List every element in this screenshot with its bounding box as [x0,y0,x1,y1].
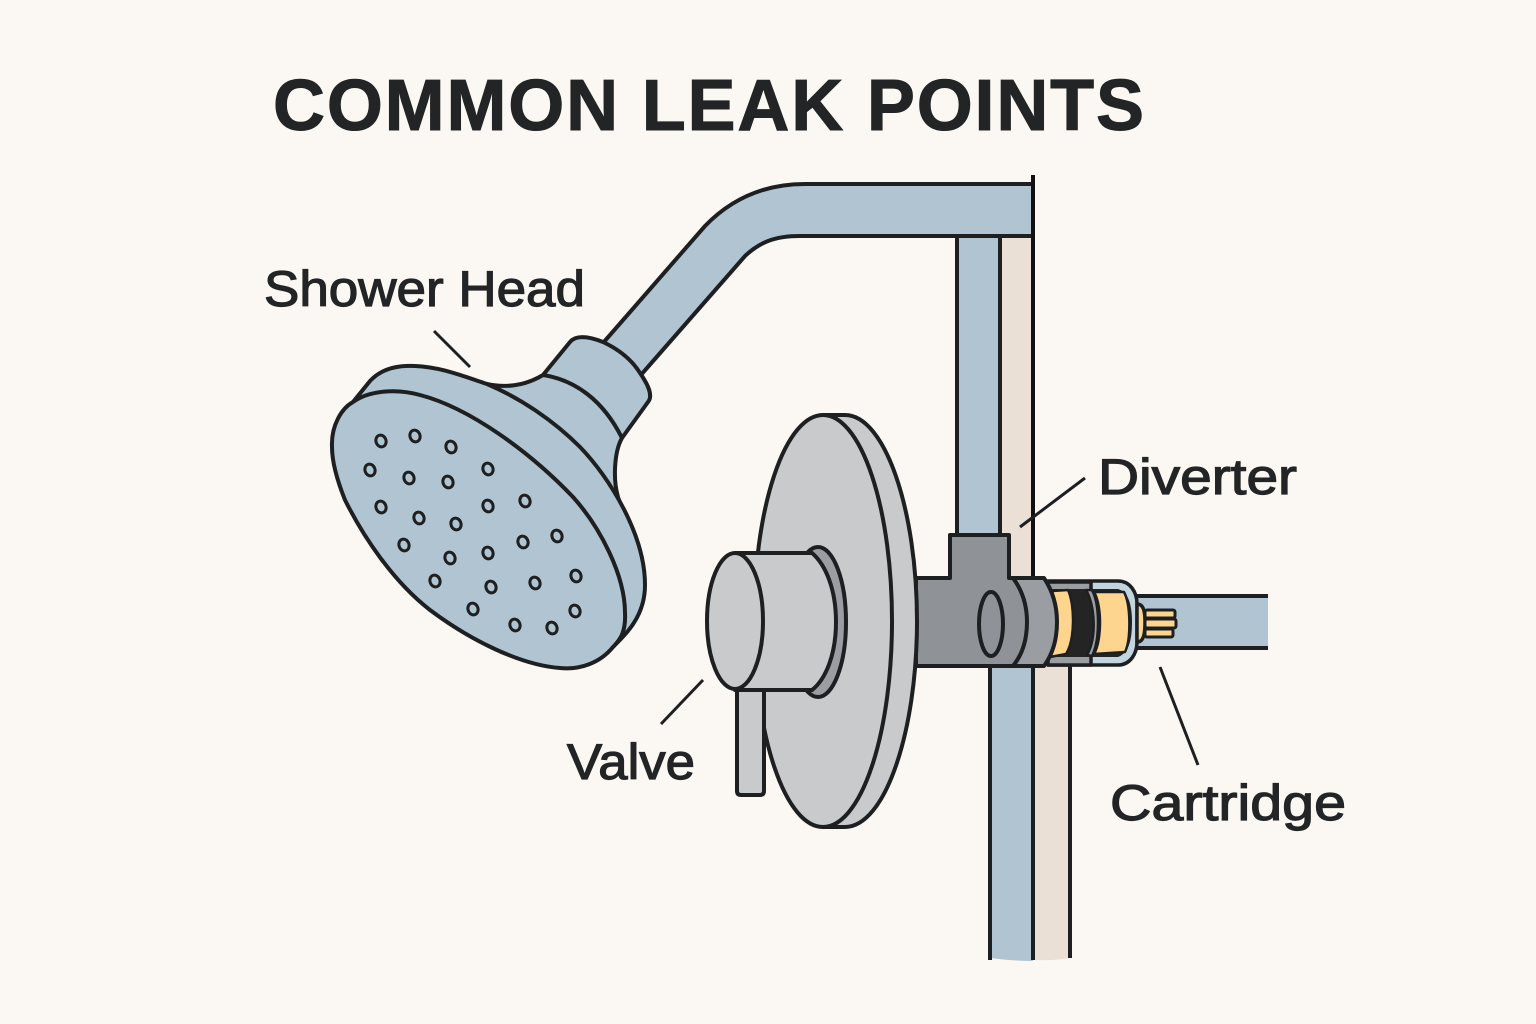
spray holes [363,429,583,635]
label: Shower Head [264,261,585,367]
upper wall section [1000,236,1033,580]
valve knob face [707,553,763,689]
face [332,391,625,668]
label: Diverter [1020,449,1297,527]
valve collar ring [790,547,846,697]
casing gray band [1048,582,1091,665]
valve plate rim [823,415,917,827]
shower arm [600,184,1033,378]
horizontal supply pipe [1130,596,1268,648]
diverter body [916,535,1057,666]
yellow seat [1050,590,1073,657]
title: COMMON LEAK POINTS [273,66,1144,146]
label: Cartridge [1110,667,1346,831]
label: Shower Head: Shower Head [264,261,585,317]
back rim [353,366,645,647]
diverter port [979,592,1003,656]
lower pipe outlines [990,665,1070,960]
yellow core [1094,592,1129,654]
neck and collar [487,337,650,560]
label: Valve [567,680,703,790]
valve hub [735,553,836,690]
shower head [332,337,650,668]
plumbing: wall and riser pipes [957,236,1070,961]
valve plate face [754,415,892,827]
valve [707,415,917,827]
stem tip [1137,604,1145,642]
valve handle [737,688,764,795]
label: Cartridge: Cartridge [1110,775,1346,831]
cartridge [1048,581,1176,665]
prongs [1145,610,1176,637]
gray ring [1086,590,1098,656]
label: Valve: Valve [567,734,695,790]
wall line [1031,175,1035,580]
inner cavity [1050,589,1132,657]
lower wall section [1033,665,1070,960]
lower riser pipe [990,665,1033,961]
cartridge casing [1048,581,1137,665]
diverter collar [1013,578,1057,666]
label: Diverter: Diverter [1098,449,1297,505]
upper riser pipe [957,236,1000,536]
